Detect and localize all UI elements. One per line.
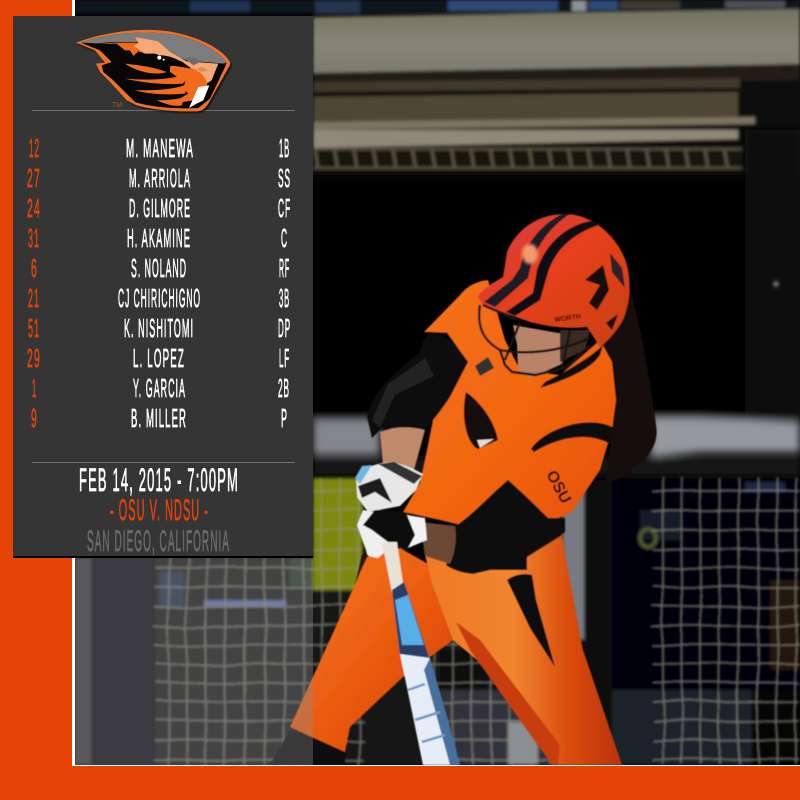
- batter 6: [31, 255, 290, 283]
- panel: lineup: 2B: [278, 375, 290, 403]
- panel: lineup: SS: [278, 165, 291, 193]
- batter 24: D. GILMORE: [129, 195, 191, 223]
- elbow pad: [367, 334, 468, 438]
- upper glove: [356, 462, 423, 512]
- hair: [600, 283, 657, 486]
- batter 12: 12: [29, 135, 40, 163]
- panel: lineup: 1B: [279, 135, 290, 163]
- faded photo strip behind panel: [75, 558, 313, 765]
- softball player: [270, 214, 657, 765]
- lower glove white part: [357, 510, 393, 558]
- batter 21: 21: [28, 285, 40, 313]
- bottom divider: [32, 462, 295, 463]
- panel: lineup: DP: [278, 315, 291, 343]
- batter 51: 51: [28, 315, 40, 343]
- top divider: [32, 110, 295, 111]
- panel: lineup: 3B: [279, 285, 290, 313]
- lower glove black part: [363, 510, 417, 550]
- bat: [382, 542, 460, 765]
- panel: lineup: SAN DIEGO, CALIFORNIA: [87, 525, 230, 558]
- panel: lineup: CF: [278, 195, 291, 223]
- batter 51: K. NISHITOMI: [124, 315, 194, 343]
- face and neck: [513, 325, 575, 378]
- panel: lineup: RF: [279, 255, 290, 283]
- trademark mark: TM: [112, 102, 122, 109]
- batter 29: 29: [27, 345, 41, 373]
- panel: lineup: [13, 16, 313, 558]
- bottom orange band: [0, 766, 800, 800]
- batter 24: [27, 195, 291, 223]
- batter 1: Y. GARCIA: [133, 375, 186, 403]
- batter 29: [27, 345, 290, 373]
- panel: lineup: LF: [279, 345, 290, 373]
- panel: lineup: FEB 14, 2015 - 7:00PM: [79, 462, 239, 498]
- Beavers logo: [76, 30, 232, 113]
- panel: lineup: P: [281, 405, 288, 433]
- batter 1: [32, 375, 290, 403]
- panel: lineup: - OSU V. NDSU -: [110, 494, 209, 527]
- white bottom rule: [72, 765, 800, 766]
- batter 31: H. AKAMINE: [127, 225, 191, 253]
- jersey: [403, 280, 616, 528]
- batting helmet: [478, 214, 630, 347]
- jersey details: [464, 345, 614, 506]
- black forearm sleeve: [446, 480, 565, 574]
- lower arm skin: [420, 522, 456, 564]
- batter 9: [31, 405, 288, 433]
- batter 9: 9: [31, 405, 38, 433]
- pants: [290, 535, 622, 765]
- batter 27: [27, 165, 291, 193]
- batter 27: 27: [27, 165, 41, 193]
- batting helmet: WORTH: [554, 313, 581, 324]
- batter 6: 6: [31, 255, 38, 283]
- rear leg: [270, 730, 345, 765]
- batter 51: [28, 315, 291, 343]
- batter 1: 1: [32, 375, 37, 403]
- batter 24: 24: [27, 195, 41, 223]
- batter 12: [29, 135, 290, 163]
- white left rule: [72, 0, 75, 766]
- batter 27: M. ARRIOLA: [129, 165, 191, 193]
- batter 31: [28, 225, 288, 253]
- batter 12: M. MANEWA: [126, 135, 194, 163]
- forearm: [380, 427, 425, 470]
- batter 21: [28, 285, 290, 313]
- lineup rows: [27, 135, 291, 433]
- batter 31: 31: [28, 225, 40, 253]
- sleeve lettering: OSU: [542, 468, 574, 506]
- batter 29: L. LOPEZ: [133, 345, 185, 373]
- panel: lineup: C: [281, 225, 288, 253]
- batter 9: B. MILLER: [131, 405, 187, 433]
- wristband: [407, 515, 427, 548]
- batter 21: CJ CHIRICHIGNO: [118, 285, 201, 313]
- left orange band: [0, 0, 72, 800]
- batter 6: S. NOLAND: [131, 255, 187, 283]
- face mask: [479, 305, 590, 375]
